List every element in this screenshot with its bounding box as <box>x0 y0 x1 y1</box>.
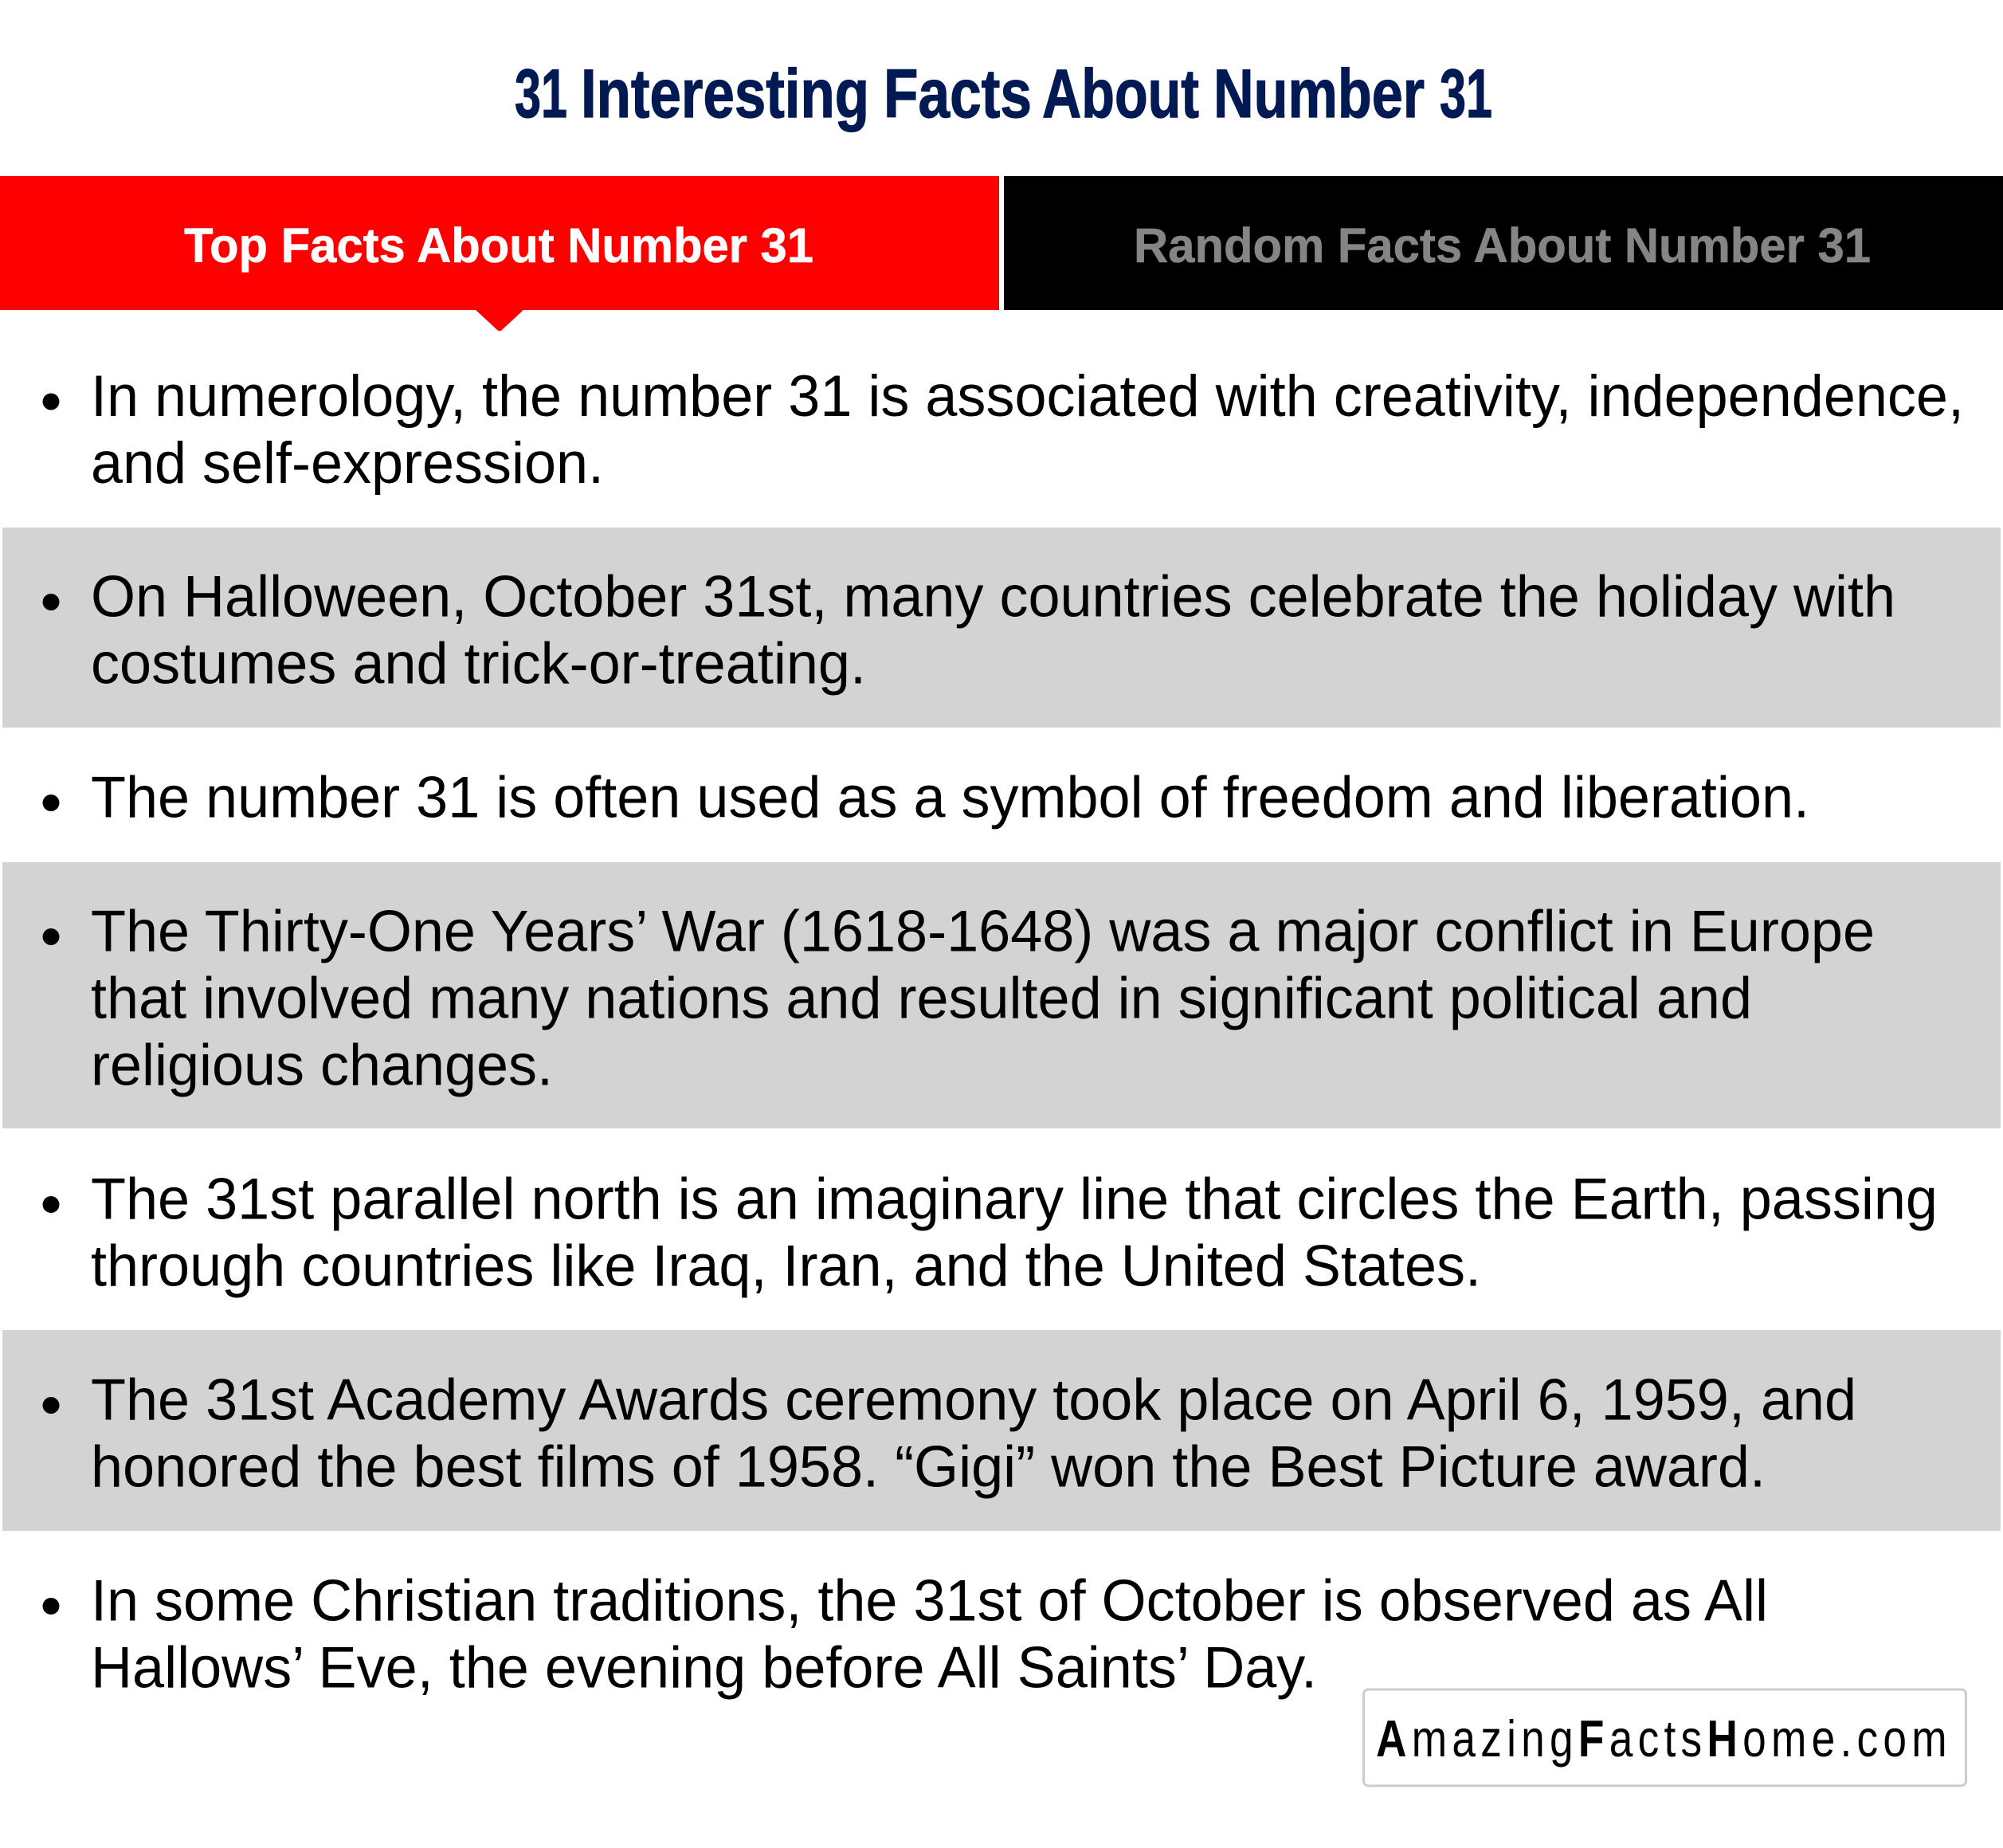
fact 6 band <box>2 1330 2001 1531</box>
fact 5: The 31st parallel north is an imaginary line that circles the Earth, passing <box>91 1167 1938 1232</box>
logo: AmazingFactsHome.com: AmazingFactsHome.com <box>1376 1709 1947 1768</box>
tab: random facts (inactive): Random Facts About Number 31 <box>1134 218 1871 273</box>
title <box>515 56 1492 132</box>
tab: top facts (active) <box>0 176 999 332</box>
fact 2 band <box>2 528 2001 728</box>
fact 7 <box>43 1568 1768 1701</box>
fact 4 band <box>2 862 2001 1128</box>
title: Number <box>1213 56 1425 132</box>
fact 6 band: The 31st Academy Awards ceremony took place on April 6, 1959, and <box>91 1367 1856 1433</box>
fact 1 <box>43 364 1964 496</box>
tab: top facts (active): Top Facts About Number 31 <box>184 218 813 273</box>
fact 7: In some Christian traditions, the 31st of October is observed as All <box>91 1568 1768 1634</box>
fact 6 band: honored the best films of 1958. “Gigi” won the Best Picture award. <box>91 1434 1766 1500</box>
fact 1: In numerology, the number 31 is associated with creativity, independence, <box>91 364 1964 429</box>
fact 4 band: that involved many nations and resulted in significant political and <box>91 966 1752 1031</box>
tab: random facts (inactive) <box>1004 176 2003 310</box>
fact 7: Hallows’ Eve, the evening before All Saints’ Day. <box>91 1635 1317 1701</box>
title: 31 <box>1440 56 1492 132</box>
fact 4 band: The Thirty-One Years’ War (1618-1648) was a major conflict in Europe <box>91 899 1875 964</box>
fact 2 band: costumes and trick-or-treating. <box>91 631 866 696</box>
fact 5 <box>43 1167 1938 1299</box>
fact 2 band: On Halloween, October 31st, many countries celebrate the holiday with <box>91 564 1895 630</box>
fact 4 band: religious changes. <box>91 1033 553 1098</box>
fact 5: through countries like Iraq, Iran, and the United States. <box>91 1234 1481 1299</box>
fact 3: The number 31 is often used as a symbol of freedom and liberation. <box>91 765 1809 830</box>
tab pointer <box>475 309 524 332</box>
title: 31 <box>515 56 567 132</box>
title: Interesting <box>581 56 869 132</box>
title: Facts <box>884 56 1032 132</box>
title: About <box>1042 56 1199 132</box>
fact 1: and self-expression. <box>91 431 604 496</box>
logo: AmazingFactsHome.com <box>1364 1689 1966 1786</box>
